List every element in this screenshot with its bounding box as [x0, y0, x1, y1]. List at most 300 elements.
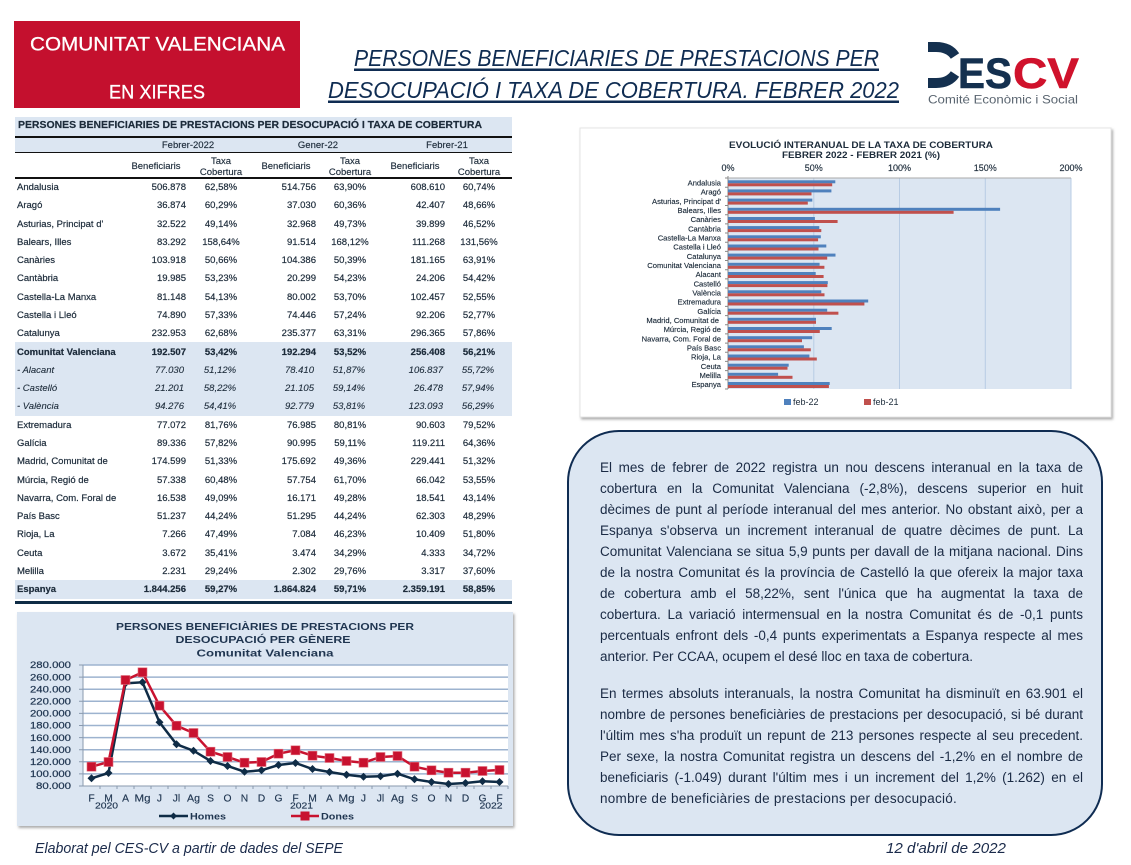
row: Catalunya: 57,86% — [463, 328, 496, 339]
row: Catalunya: Catalunya — [17, 328, 60, 339]
bar chart category labels: Navarra, Com. Foral de — [642, 334, 721, 343]
table column headers: Cobertura — [458, 167, 501, 178]
bar chart axis labels: 0% — [721, 163, 735, 173]
bar chart category labels: Extremadura — [678, 298, 722, 307]
row: Navarra: 43,14% — [463, 493, 496, 504]
row: Navarra — [17, 493, 496, 504]
row: Múrcia: 53,55% — [463, 475, 496, 486]
legend: Homes and Dones: Homes — [190, 812, 226, 822]
row: Ceuta: 35,41% — [205, 548, 238, 559]
logo: CES CV: ES — [958, 50, 1012, 98]
panel: commentary text — [567, 430, 1103, 836]
row: Alacant: - Alacant — [17, 365, 54, 376]
table column headers: Taxa — [211, 156, 232, 167]
row: Comunitat Valenciana: 192.294 — [282, 347, 317, 358]
row: Aragó: 42.407 — [416, 200, 445, 211]
row: Catalunya: 296.365 — [411, 328, 445, 339]
row: Melilla: 2.231 — [162, 566, 186, 577]
bar chart legend: feb-21 — [873, 397, 899, 407]
row: Rioja: 47,49% — [205, 529, 238, 540]
y axis labels — [30, 660, 71, 791]
row: Ceuta — [17, 548, 496, 559]
x axis labels: Ag — [187, 794, 200, 805]
row: Galícia: 59,11% — [334, 438, 366, 449]
row: Espanya: 1.864.824 — [274, 584, 317, 595]
row: Aragó: 48,66% — [463, 200, 496, 211]
row: País Basc: 44,24% — [334, 511, 367, 522]
row: Castella i Lleó: 74.890 — [157, 310, 186, 321]
row: Navarra: 49,28% — [334, 493, 367, 504]
row: Alacant: 55,72% — [462, 365, 495, 376]
y axis labels: 220.000 — [30, 696, 71, 706]
x axis labels: D — [462, 794, 469, 805]
bar chart category labels: Catalunya — [687, 252, 722, 261]
row: Catalunya — [17, 328, 496, 339]
x axis labels: N — [241, 794, 248, 805]
row: Castelló: 58,22% — [204, 383, 237, 394]
row: Balears: 158,64% — [202, 237, 240, 248]
row: València — [17, 401, 495, 412]
row: Asturias: 46,52% — [463, 219, 496, 230]
line chart title — [116, 620, 415, 660]
x axis labels: Jl — [377, 794, 384, 805]
paragraph: coverage rate: Espanya s'observa un increment interanual de quatre dècimes de punt. La — [600, 523, 1083, 538]
row: Melilla: 29,24% — [205, 566, 238, 577]
bar chart category labels: Castella i Lleó — [673, 243, 721, 252]
row: Madrid: Madrid, Comunitat de — [17, 456, 108, 467]
row: Rioja: 51,80% — [463, 529, 496, 540]
row: Comunitat Valenciana — [17, 347, 496, 358]
row: Asturias: 32.522 — [157, 219, 186, 230]
panel: line chart beneficiaries by gender — [17, 612, 513, 826]
row: València: 94.276 — [155, 401, 185, 412]
row: Alacant: 51,87% — [333, 365, 366, 376]
paragraph: absolute figures: Per sexe, la nostra Comunitat registra un descens del -1,2% en el nombre de — [600, 749, 1083, 764]
row: Espanya: 1.844.256 — [144, 584, 186, 595]
row: València: 92.779 — [285, 401, 315, 412]
row: Alacant: 77.030 — [155, 365, 185, 376]
row: Catalunya: 62,68% — [205, 328, 238, 339]
row: Rioja: 7.084 — [292, 529, 316, 540]
x axis labels: M — [308, 794, 317, 805]
paragraph: absolute figures — [600, 686, 1083, 806]
series: Homes — [92, 682, 500, 784]
row: Balears: 131,56% — [460, 237, 498, 248]
row: Castella-La Manxa: Castella-La Manxa — [17, 292, 97, 303]
paragraph: absolute figures: beneficiaris (-1.049) durant l'últim mes i un increment del 1,2% (1.262) en el — [600, 770, 1083, 785]
row: Rioja: Rioja, La — [17, 529, 55, 540]
row: Madrid — [17, 456, 496, 467]
bar chart category labels: Asturias, Principat d' — [652, 197, 722, 206]
row: Andalusia: Andalusia — [17, 182, 59, 193]
x axis labels: Ag — [391, 794, 404, 805]
x axis labels: A — [122, 794, 129, 805]
row: Múrcia: 66.042 — [416, 475, 445, 486]
row: Comunitat Valenciana: 53,42% — [205, 347, 238, 358]
bar chart category labels: Madrid, Comunitat de — [646, 316, 719, 325]
x axis labels — [88, 794, 503, 810]
paragraph: coverage rate — [600, 460, 1083, 664]
row: Canàries: 50,39% — [334, 255, 367, 266]
row: Canàries: 50,66% — [205, 255, 238, 266]
row: Aragó: 36.874 — [157, 200, 186, 211]
row: País Basc: País Basc — [17, 511, 60, 522]
x axis labels: J — [157, 794, 162, 805]
table column headers: Beneficiaris — [390, 161, 440, 172]
row: València: 56,29% — [462, 401, 495, 412]
bar chart category labels — [642, 178, 722, 389]
row: Castella-La Manxa: 102.457 — [411, 292, 445, 303]
row: Múrcia: 57.754 — [287, 475, 316, 486]
row: Navarra: 18.541 — [416, 493, 445, 504]
row: Comunitat Valenciana: 256.408 — [411, 347, 445, 358]
row: Rioja — [17, 529, 496, 540]
row: Espanya: 2.359.191 — [403, 584, 446, 595]
row: Galícia: 57,82% — [205, 438, 238, 449]
row: València: 53,81% — [333, 401, 366, 412]
row: Castelló: 57,94% — [462, 383, 495, 394]
x axis labels: 2020 — [95, 802, 119, 810]
row: Espanya: 59,71% — [334, 584, 367, 595]
row: Alacant — [17, 365, 495, 376]
row: País Basc — [17, 511, 496, 522]
line chart title: DESOCUPACIÓ PER GÈNERE — [176, 633, 351, 646]
paragraph: coverage rate: de cobertura amb el 58,22%, sent l'única que ha augmentat la taxa de — [600, 586, 1083, 601]
row: Ceuta: 34,29% — [334, 548, 367, 559]
row: Canàries — [17, 255, 496, 266]
row: Melilla: Melilla — [17, 566, 45, 577]
row: Andalusia: 506.878 — [152, 182, 186, 193]
row: Galícia: 90.995 — [287, 438, 316, 449]
y axis labels: 100.000 — [30, 769, 71, 779]
bar chart category labels: Comunitat Valenciana — [647, 261, 722, 270]
source note: Elaborat pel CES-CV a partir de dades del SEPE — [35, 841, 343, 857]
bar chart category labels: Espanya — [691, 380, 722, 389]
row: Madrid: 49,36% — [334, 456, 367, 467]
row: Espanya: 59,27% — [205, 584, 238, 595]
row: Ceuta: 3.474 — [292, 548, 316, 559]
badge: Comunitat Valenciana en xifres — [14, 21, 300, 108]
x axis labels: 2021 — [290, 802, 314, 810]
series: Dones — [92, 672, 500, 773]
row: Galícia: Galícia — [17, 438, 47, 449]
row: Múrcia: 57.338 — [157, 475, 186, 486]
row: Asturias: 39.899 — [416, 219, 445, 230]
paragraph: absolute figures: l'últim mes s'ha produït un repunt de 213 persones respecte al seu precedent. — [600, 728, 1083, 743]
bar chart category labels: Galícia — [697, 307, 722, 316]
table column headers: Febrer-21 — [426, 140, 468, 151]
row: Alacant: 106.837 — [409, 365, 444, 376]
logo: CES CV: Comité Econòmic i Social — [928, 92, 1078, 106]
x axis labels: F — [496, 794, 503, 805]
row: Melilla: 3.317 — [421, 566, 445, 577]
legend: Homes and Dones: Dones — [321, 812, 354, 822]
title — [328, 45, 899, 103]
row: Navarra: 49,09% — [205, 493, 238, 504]
row: Andalusia: 608.610 — [411, 182, 445, 193]
bar chart title: EVOLUCIÓ INTERANUAL DE LA TAXA DE COBERTURA — [729, 139, 993, 151]
row: Navarra: 16.171 — [287, 493, 316, 504]
x axis labels: G — [274, 794, 283, 805]
row: Múrcia: 61,70% — [334, 475, 367, 486]
x axis labels: Mg — [338, 794, 355, 805]
logo: CES CV — [928, 47, 1079, 106]
row: Castella i Lleó: 57,24% — [334, 310, 367, 321]
panel: bar chart coverage rate — [580, 128, 1111, 417]
bar chart legend — [784, 397, 899, 407]
row: Madrid: 51,32% — [463, 456, 496, 467]
row: Múrcia — [17, 475, 496, 486]
x axis labels: 2022 — [480, 802, 503, 810]
x axis labels: Jl — [173, 794, 180, 805]
row: Alacant: 51,12% — [204, 365, 237, 376]
x axis labels: O — [223, 794, 232, 805]
x axis labels: A — [326, 794, 333, 805]
table column headers — [131, 140, 501, 178]
x axis labels: S — [411, 794, 418, 805]
row: Aragó — [17, 200, 496, 211]
bar chart axis labels — [721, 163, 1083, 173]
row: Castella-La Manxa — [17, 292, 496, 303]
paragraph: coverage rate: cobertura. La variació intermensual en la nostra Comunitat és de -0,1 punts — [600, 607, 1083, 622]
row: Galícia — [17, 438, 496, 449]
row: Melilla — [17, 566, 496, 577]
row: Castella-La Manxa: 52,55% — [463, 292, 496, 303]
row: Catalunya: 235.377 — [282, 328, 316, 339]
row: Ceuta: Ceuta — [17, 548, 43, 559]
row: Extremadura: 80,81% — [334, 420, 367, 431]
row: Galícia: 89.336 — [157, 438, 186, 449]
x axis labels: S — [207, 794, 214, 805]
row: País Basc: 51.295 — [287, 511, 316, 522]
row: Castella i Lleó: 92.206 — [416, 310, 445, 321]
paragraph: coverage rate: dècimes de punt al període interanual del mes anterior. No obstant això, per a — [600, 502, 1083, 517]
bar chart category labels: Alacant — [696, 270, 722, 279]
row: Canàries: 103.918 — [152, 255, 186, 266]
row: Castella i Lleó: 74.446 — [287, 310, 316, 321]
row: Galícia: 64,36% — [463, 438, 496, 449]
row: Castelló: 21.105 — [284, 383, 315, 394]
table column headers: Cobertura — [329, 167, 372, 178]
y axis labels: 180.000 — [30, 721, 71, 731]
table column headers: Febrer-2022 — [162, 140, 214, 151]
row: Castella-La Manxa: 54,13% — [205, 292, 238, 303]
table: beneficiaries and coverage rate — [15, 117, 512, 604]
x axis labels: F — [88, 794, 95, 805]
paragraph: absolute figures: nombre de persones beneficiàries de prestacions per desocupació, si bé durant — [600, 707, 1083, 722]
row: Castelló: 26.478 — [413, 383, 444, 394]
bar chart category labels: Canàries — [691, 215, 721, 224]
paragraph: coverage rate: anterior. Per CCAA, ocupem el desé lloc en taxa de cobertura. — [600, 649, 973, 664]
bars: feb-22 — [728, 180, 1000, 385]
row: Balears: 111.268 — [412, 237, 445, 248]
row: Extremadura: 77.072 — [157, 420, 186, 431]
date: 12 d'abril de 2022 — [886, 841, 1006, 857]
row: Melilla: 37,60% — [463, 566, 496, 577]
row: València: 54,41% — [204, 401, 237, 412]
bar chart category labels: Cantàbria — [688, 224, 722, 233]
row: Asturias — [17, 219, 496, 230]
row: Castella i Lleó: Castella i Lleó — [17, 310, 77, 321]
bar chart category labels: Rioja, La — [691, 353, 722, 362]
row: Cantàbria — [17, 273, 496, 284]
row: Múrcia: 60,48% — [205, 475, 238, 486]
row: País Basc: 44,24% — [205, 511, 238, 522]
row: País Basc: 48,29% — [463, 511, 496, 522]
row: Andalusia: 514.756 — [282, 182, 316, 193]
bar chart category labels: Castella-La Manxa — [658, 234, 722, 242]
table column headers: Beneficiaris — [131, 161, 181, 172]
row: Navarra: 16.538 — [157, 493, 186, 504]
row: Andalusia: 62,58% — [205, 182, 238, 193]
row: Extremadura: 90.603 — [416, 420, 445, 431]
row: Comunitat Valenciana: Comunitat Valenciana — [17, 347, 116, 358]
row: Ceuta: 4.333 — [421, 548, 445, 559]
paragraph: coverage rate: percentuals enfront dels -0,4 punts experimentats a Espanya respecte al mes — [600, 628, 1083, 643]
bar chart axis labels: 200% — [1059, 163, 1083, 173]
row: Espanya — [17, 584, 496, 595]
row: Castella-La Manxa: 81.148 — [157, 292, 186, 303]
paragraph: coverage rate: cobertura en la Comunitat Valenciana (-2,8%), descens superior en huit — [600, 481, 1083, 496]
title: PERSONES BENEFICIARIES DE PRESTACIONS PER — [354, 45, 879, 71]
x axis labels: M — [104, 794, 113, 805]
row: Alacant: 78.410 — [285, 365, 315, 376]
row: Extremadura: 79,52% — [463, 420, 496, 431]
row: Canàries: 63,91% — [463, 255, 496, 266]
bar chart category labels: Castelló — [694, 279, 721, 288]
row: Extremadura — [17, 420, 496, 431]
x axis labels: G — [478, 794, 487, 805]
y axis labels: 260.000 — [30, 672, 71, 682]
row: Canàries: Canàries — [17, 255, 55, 266]
row: Ceuta: 34,72% — [463, 548, 496, 559]
row: Aragó: 60,29% — [205, 200, 238, 211]
x axis labels: N — [445, 794, 452, 805]
row: Comunitat Valenciana: 192.507 — [152, 347, 186, 358]
row: València: 123.093 — [409, 401, 444, 412]
badge: Comunitat Valenciana en xifres: COMUNITAT VALENCIANA — [30, 34, 285, 56]
row: Cantàbria: Cantàbria — [17, 273, 59, 284]
paragraph: coverage rate: Comunitat Valenciana se situa 5,9 punts per davall de la mitjana nacional. Dins — [600, 544, 1083, 559]
y axis labels: 160.000 — [30, 733, 71, 743]
row: Galícia: 119.211 — [412, 438, 445, 449]
bar chart category labels: Múrcia, Regió de — [664, 325, 721, 334]
x axis labels: O — [427, 794, 436, 805]
y axis labels: 280.000 — [30, 660, 71, 670]
row: Andalusia — [17, 182, 496, 193]
row: Aragó: 37.030 — [287, 200, 316, 211]
bar chart axis labels: 50% — [805, 163, 823, 173]
row: Balears — [17, 237, 498, 248]
row: Balears: Balears, Illes — [17, 237, 72, 248]
table column headers: Cobertura — [200, 167, 243, 178]
row: Cantàbria: 24.206 — [416, 273, 445, 284]
row: Cantàbria: 19.985 — [157, 273, 186, 284]
badge: Comunitat Valenciana en xifres: EN XIFRES — [109, 81, 205, 103]
bar chart category labels: Andalusia — [688, 178, 722, 188]
row: Balears: 91.514 — [287, 237, 316, 248]
x axis labels: D — [258, 794, 265, 805]
bar chart axis labels: 150% — [974, 163, 997, 173]
row: Madrid: 229.441 — [411, 456, 445, 467]
y axis labels: 240.000 — [30, 684, 71, 694]
row: Cantàbria: 20.299 — [287, 273, 316, 284]
y axis labels: 200.000 — [30, 709, 71, 719]
row: Ceuta: 3.672 — [162, 548, 186, 559]
row: Comunitat Valenciana: 56,21% — [463, 347, 496, 358]
row: Madrid: 51,33% — [205, 456, 238, 467]
row: Catalunya: 232.953 — [152, 328, 186, 339]
row: Extremadura: 81,76% — [205, 420, 238, 431]
table column headers: Taxa — [340, 156, 361, 167]
row: València: - València — [17, 401, 59, 412]
row: Espanya: Espanya — [17, 584, 57, 595]
row: Castelló — [17, 383, 495, 394]
row: Madrid: 175.692 — [282, 456, 316, 467]
line chart title: Comunitat Valenciana — [196, 648, 334, 660]
bar chart category labels: Balears, Illes — [678, 206, 721, 215]
row: Madrid: 174.599 — [152, 456, 186, 467]
legend: Homes and Dones — [159, 812, 354, 822]
row: País Basc: 51.237 — [157, 511, 186, 522]
row: Extremadura: Extremadura — [17, 420, 72, 431]
row: Castelló: - Castelló — [17, 383, 58, 394]
row: Asturias: 49,14% — [205, 219, 238, 230]
bars: feb-21 — [728, 183, 954, 388]
bar chart axis labels: 100% — [888, 163, 911, 173]
row: Aragó: 60,36% — [334, 200, 367, 211]
row: Castelló: 21.201 — [154, 383, 184, 394]
y axis labels: 140.000 — [30, 745, 71, 755]
row: Espanya: 58,85% — [463, 584, 496, 595]
row: Canàries: 181.165 — [411, 255, 445, 266]
row: Castella-La Manxa: 53,70% — [334, 292, 367, 303]
row: Cantàbria: 54,42% — [463, 273, 496, 284]
bar chart category labels: Aragó — [701, 188, 721, 197]
y axis labels: 80.000 — [36, 781, 71, 791]
row: Castelló: 59,14% — [333, 383, 366, 394]
row: Castella-La Manxa: 80.002 — [287, 292, 316, 303]
row: Extremadura: 76.985 — [287, 420, 316, 431]
bar chart legend: feb-22 — [793, 397, 819, 407]
row: Comunitat Valenciana: 53,52% — [334, 347, 367, 358]
row: Andalusia: 60,74% — [463, 182, 496, 193]
row: Asturias: 49,73% — [334, 219, 367, 230]
row: Asturias: 32.968 — [287, 219, 316, 230]
table column headers: Beneficiaris — [261, 161, 311, 172]
row: Balears: 168,12% — [331, 237, 369, 248]
row: Castella i Lleó: 57,33% — [205, 310, 238, 321]
row: Melilla: 2.302 — [292, 566, 316, 577]
row: Catalunya: 63,31% — [334, 328, 367, 339]
row: Rioja: 46,23% — [334, 529, 367, 540]
bar chart category labels: País Basc — [687, 344, 721, 353]
x axis labels: J — [361, 794, 366, 805]
paragraph: coverage rate: de la nostra Comunitat és la província de Castelló la que ofereix la major taxa — [600, 565, 1083, 580]
paragraph: coverage rate: El mes de febrer de 2022 registra un nou descens interanual en la taxa de — [600, 460, 1083, 475]
bar chart title: FEBRER 2022 - FEBRER 2021 (%) — [782, 150, 940, 161]
row: Cantàbria: 53,23% — [205, 273, 238, 284]
title: DESOCUPACIÓ I TAXA DE COBERTURA. FEBRER 2022 — [328, 77, 899, 103]
row: Cantàbria: 54,23% — [334, 273, 367, 284]
row: Rioja: 10.409 — [416, 529, 445, 540]
paragraph: absolute figures: nombre de beneficiàries de prestacions per desocupació. — [600, 791, 957, 806]
row: Navarra: Navarra, Com. Foral de — [17, 493, 116, 504]
row: Melilla: 29,76% — [334, 566, 367, 577]
row: Canàries: 104.386 — [282, 255, 316, 266]
row: Castella i Lleó: 52,77% — [463, 310, 496, 321]
y axis labels: 120.000 — [30, 757, 71, 767]
